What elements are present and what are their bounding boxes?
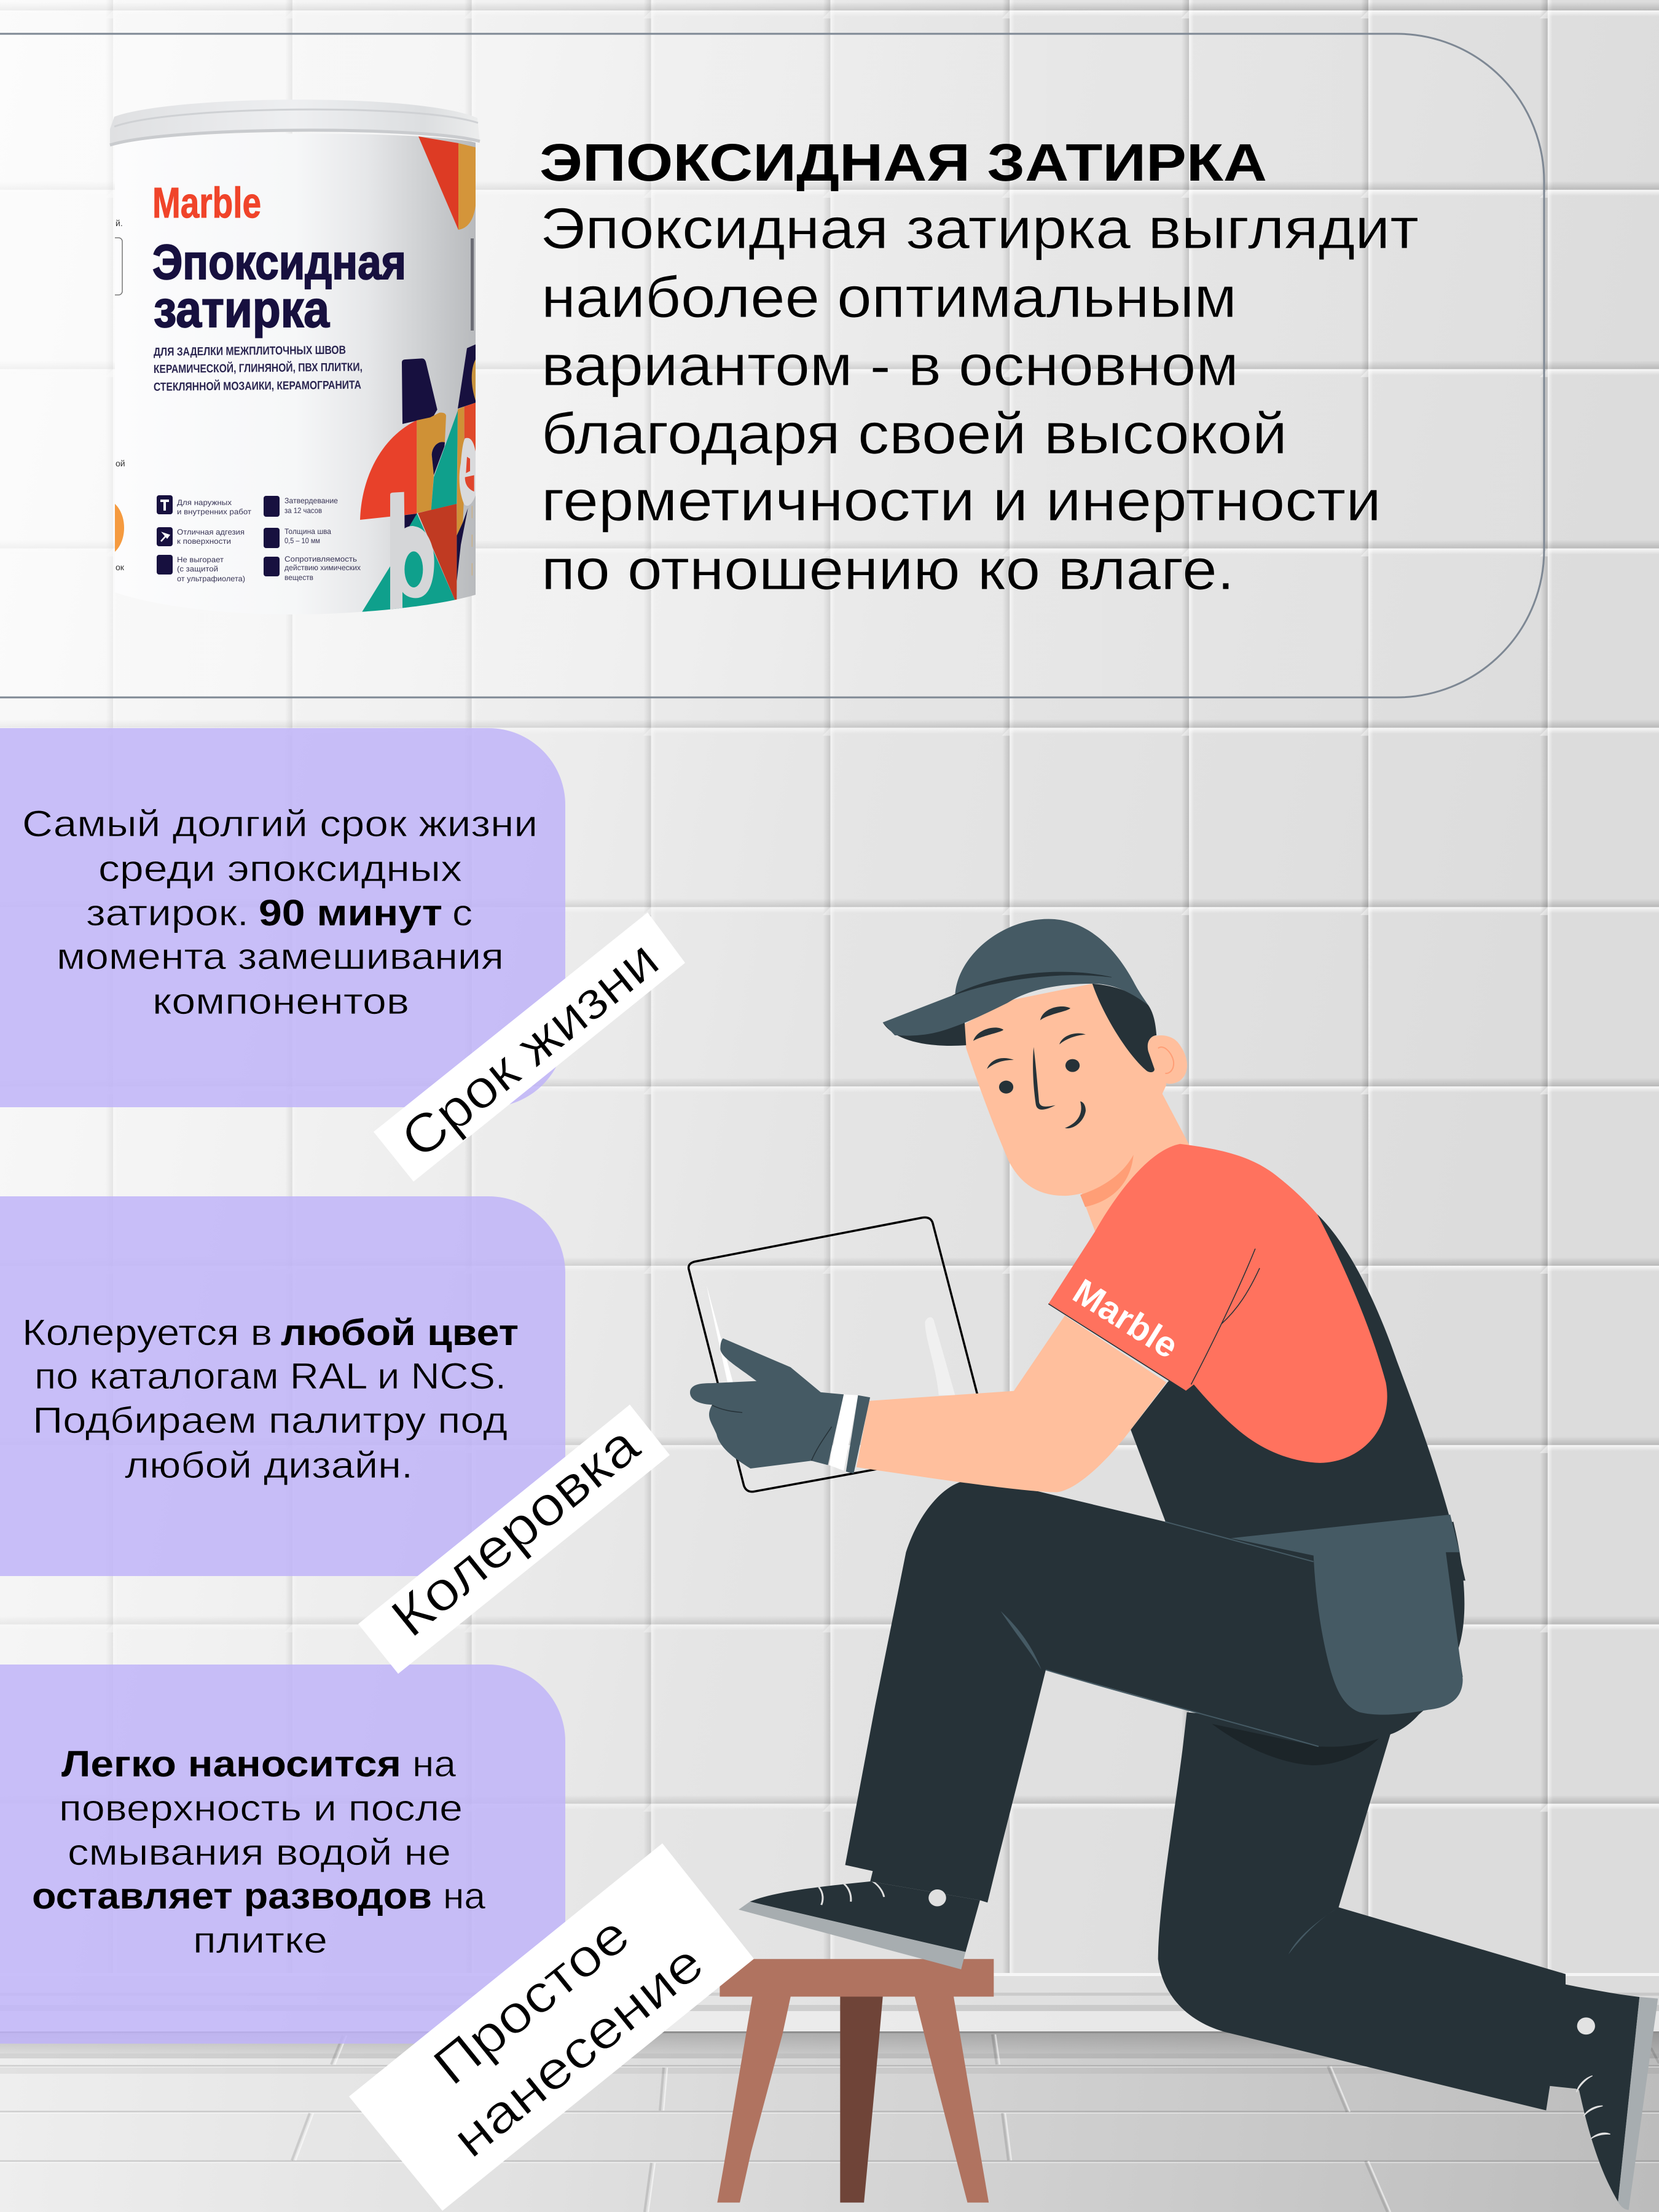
bucket side fragments [116, 218, 125, 572]
label: tinting: Колеровка [380, 1414, 651, 1649]
shirt logo: Marble [1066, 1271, 1185, 1367]
bucket title: затирка [154, 280, 330, 338]
text block: description: вариантом - в основном [541, 333, 1239, 398]
text block: description: герметичности и инертности [541, 468, 1381, 533]
eyes [999, 1059, 1080, 1094]
bucket subtitle: КЕРАМИЧЕСКОЙ, ГЛИНЯНОЙ, ПВХ ПЛИТКИ, [154, 359, 363, 376]
back shoe [1556, 1984, 1658, 2210]
cap [883, 919, 1148, 1036]
bucket side fragments: й. [116, 218, 123, 228]
glove [690, 1338, 844, 1469]
text block: description: Эпоксидная затирка выглядит [540, 196, 1419, 261]
bucket side fragments: ой [116, 458, 125, 468]
panel text: tinting: по каталогам RAL и NCS. [34, 1355, 506, 1397]
bucket body [115, 133, 476, 614]
trouser creases [1001, 1611, 1339, 1955]
panel text: service life [22, 803, 538, 1022]
panel text: service life: Самый долгий срок жизни [22, 803, 538, 844]
bucket feature list: за 12 часов [284, 506, 322, 515]
panel: service life [0, 728, 565, 1107]
thigh shadow [1212, 1724, 1379, 1765]
bucket title [152, 235, 406, 338]
bucket feature list: действию химических [284, 563, 361, 572]
label: easy application [349, 1843, 754, 2211]
bucket feature list: к поверхности [177, 537, 231, 546]
ear [1147, 1035, 1187, 1084]
bucket feature list [157, 495, 361, 583]
bucket title: Эпоксидная [152, 235, 406, 289]
bucket feature list: Не выгорает [177, 555, 224, 564]
face [963, 984, 1166, 1196]
bucket graphic decor [85, 136, 476, 614]
bucket feature list: от ультрафиолета) [177, 575, 245, 583]
overalls torso [1131, 1214, 1465, 1580]
glove cuff [829, 1394, 858, 1471]
shoe eyelet [928, 1889, 946, 1907]
neck shadow [1080, 1155, 1134, 1207]
panel: easy application [0, 1665, 565, 2044]
illustration: worker [689, 919, 1658, 2210]
panel text: tinting: Подбираем палитру под [33, 1400, 508, 1441]
text block: description: благодаря своей высокой [541, 401, 1287, 466]
cap brim underside [883, 1020, 966, 1046]
panel text: tinting: Колеруется в [22, 1312, 272, 1353]
tool belt pouch [1231, 1515, 1463, 1715]
bucket feature list: Толщина шва [284, 527, 331, 536]
panel text: easy application: оставляет разводов [32, 1875, 432, 1916]
panel text: easy application: Легко наносится [61, 1743, 401, 1784]
front shoe [739, 1880, 980, 1969]
arm [857, 1316, 1166, 1492]
panel text: tinting: любой цвет [281, 1312, 519, 1353]
label: service life: Срок жизни [390, 928, 670, 1170]
bucket feature list: и внутренних работ [177, 508, 251, 516]
bucket lid [110, 100, 480, 146]
shirt creases [1048, 1249, 1260, 1391]
stool [717, 1959, 994, 2203]
panel text: easy application: на [443, 1875, 486, 1916]
label: easy application: нанесение [442, 1932, 715, 2169]
bucket feature list: Затвердевание [284, 496, 338, 505]
text block: description [540, 196, 1419, 602]
panel text: easy application: плитке [193, 1920, 327, 1961]
text block: description: наиболее оптимальным [541, 265, 1237, 329]
bucket feature list: (с защитой [177, 565, 218, 573]
heading: ЭПОКСИДНАЯ ЗАТИРКА [539, 133, 1267, 192]
bucket feature list: Сопротивляемость [284, 555, 357, 563]
bucket subtitle: ДЛЯ ЗАДЕЛКИ МЕЖПЛИТОЧНЫХ ШВОВ [154, 344, 346, 359]
bucket brand: Marble [152, 179, 261, 227]
panel text: service life: 90 минут [259, 892, 442, 933]
panel text: easy application: на [412, 1743, 457, 1784]
bucket subtitle [154, 344, 363, 394]
panel text: tinting: любой дизайн. [125, 1445, 413, 1486]
hair [1092, 984, 1156, 1072]
legs and shoes [739, 1481, 1577, 2111]
stool seat and front legs [717, 1959, 994, 2203]
front leg and hip [845, 1481, 1464, 1902]
panel text: tinting [22, 1312, 519, 1486]
panel text: easy application [32, 1743, 486, 1961]
panel text: easy application: поверхность и после [59, 1787, 463, 1829]
product: paint bucket [85, 100, 480, 614]
panel text: service life: с [452, 892, 473, 933]
panel text: service life: среди эпоксидных [98, 848, 462, 889]
bucket feature list: Отличная адгезия [177, 528, 245, 536]
label: easy application: Простое [423, 1905, 640, 2096]
bucket feature list: веществ [284, 573, 313, 582]
ear detail [1158, 1047, 1174, 1073]
panel text: easy application: смывания водой не [68, 1832, 451, 1873]
text block: description: по отношению ко влаге. [541, 537, 1234, 602]
bucket side fragments: ок [116, 562, 125, 572]
panel text: service life: компонентов [152, 981, 409, 1022]
panel: product description outline [0, 34, 1544, 697]
bucket feature list: Для наружных [177, 498, 232, 507]
bucket subtitle: СТЕКЛЯННОЙ МОЗАИКИ, КЕРАМОГРАНИТА [154, 377, 361, 394]
panel text: service life: момента замешивания [57, 936, 504, 977]
stool back leg [840, 1996, 883, 2203]
neck [1081, 1081, 1190, 1231]
panel: tinting [0, 1196, 565, 1576]
bucket feature list: 0,5 – 10 мм [284, 536, 320, 545]
shirt [1048, 1144, 1387, 1463]
label: tinting [358, 1405, 670, 1674]
head and upper body [690, 919, 1387, 1492]
facial lines [973, 1006, 1086, 1128]
panel text: service life: затирок. [86, 892, 249, 933]
glove creases [712, 1405, 832, 1461]
tablet / glass tile [689, 1217, 991, 1492]
back leg [1158, 1712, 1577, 2111]
cap crease [952, 972, 1112, 995]
